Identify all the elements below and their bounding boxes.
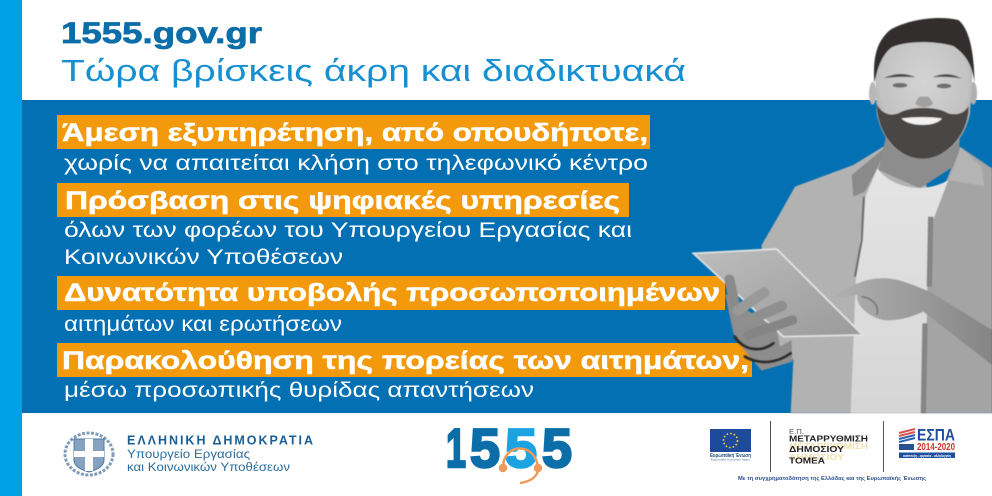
subtitle: Τώρα βρίσκεις άκρη και διαδικτυακά — [61, 53, 686, 88]
collar right — [948, 147, 984, 186]
cross horizontal — [74, 451, 104, 457]
wreath — [65, 433, 113, 475]
programme word 1 reflection: ΜΕΤΑΡΡΥΘΜΙΣΗ — [789, 442, 868, 451]
ministry line 2: και Κοινωνικών Υποθέσεων — [127, 460, 290, 474]
orange highlight 2 — [57, 183, 629, 217]
ESPA logo — [899, 426, 955, 458]
shirt fold — [855, 197, 864, 277]
sidebar stripe — [0, 0, 22, 496]
ESPA slogan bar — [899, 452, 955, 458]
programme word 2: ΔΗΜΟΣΙΟΥ — [789, 444, 844, 454]
tablet — [693, 249, 863, 337]
beard — [877, 104, 969, 159]
programme abbreviation: Ε.Π. — [789, 429, 804, 436]
programme word 2 reflection: ΔΗΜΟΣΙΟΥ — [789, 453, 845, 462]
stars — [724, 434, 738, 448]
eye left — [893, 83, 907, 88]
benefit 1 — [57, 115, 650, 175]
1555 logo — [446, 417, 572, 483]
heading 4: Παρακολούθηση της πορείας των αιτημάτων, — [62, 347, 749, 375]
eyebrow left — [884, 74, 915, 78]
palm — [725, 293, 792, 371]
ministry line 1: Υπουργείο Εργασίας — [127, 447, 250, 461]
description 2 second line: Κοινωνικών Υποθέσεων — [64, 246, 343, 269]
description 4: μέσω προσωπικής θυρίδας απαντήσεων — [64, 379, 534, 402]
digit 1: 1 — [446, 417, 466, 479]
thumb — [729, 279, 735, 305]
mouth — [901, 117, 942, 125]
shield — [74, 439, 104, 472]
programme word 3: ΤΟΜΕΑ — [789, 456, 825, 466]
flag — [710, 429, 751, 452]
orange highlight 4 — [57, 343, 752, 377]
footer emblem: Hellenic Republic — [65, 433, 113, 475]
wristband — [735, 337, 791, 362]
neck — [878, 133, 960, 188]
finger 1 — [738, 293, 764, 310]
digit 5: 5 — [470, 417, 500, 479]
programme logo — [789, 429, 868, 466]
description 3: αιτημάτων και ερωτήσεων — [64, 313, 342, 336]
orange highlight 1 — [57, 115, 650, 149]
EU label: Ευρωπαϊκή Ένωση — [710, 453, 751, 459]
flag stripes — [899, 429, 915, 442]
benefit 4 — [57, 343, 752, 402]
ESPA wordmark: ΕΣΠΑ — [917, 426, 955, 444]
eye right — [937, 84, 951, 88]
orange highlight 3 — [57, 276, 725, 310]
benefit 3 — [57, 276, 725, 336]
t-shirt — [851, 168, 948, 413]
title: 1555.gov.gr — [61, 17, 262, 50]
collar left — [852, 147, 886, 197]
programme word 1: ΜΕΤΑΡΡΥΘΜΙΣΗ — [789, 434, 868, 444]
fund label: Ευρωπαϊκό Κοινωνικό Ταμείο — [711, 458, 750, 462]
heading 2: Πρόσβαση στις ψηφιακές υπηρεσίες — [65, 187, 620, 215]
finger 3 — [748, 320, 793, 335]
description 1: χωρίς να απαιτείται κλήση στο τηλεφωνικό κέντρο — [64, 152, 648, 175]
heading 3: Δυνατότητα υποβολής προσωποποιημένων — [64, 279, 720, 307]
description 2: όλων των φορέων του Υπουργείου Εργασίας και — [64, 219, 632, 242]
face — [875, 40, 973, 158]
ESPA small flags — [899, 444, 914, 450]
divider right — [883, 421, 884, 472]
hair — [874, 18, 975, 83]
shirt placket — [923, 217, 931, 413]
panel: blue band — [22, 100, 992, 413]
cross vertical — [85, 439, 93, 471]
ear left — [869, 82, 876, 105]
eyebrow right — [933, 74, 962, 79]
holding hand — [725, 279, 793, 371]
republic name: ΕΛΛΗΝΙΚΗ ΔΗΜΟΚΡΑΤΙΑ — [127, 434, 313, 448]
ear right — [970, 82, 977, 105]
digit 5 light: 5 — [505, 417, 537, 479]
divider left — [770, 421, 771, 472]
pointing arm — [833, 278, 992, 365]
finger shadows — [862, 297, 878, 315]
co-financing caption: Με τη συγχρηματοδότηση της Ελλάδας και της Ευρωπαϊκής Ένωσης — [738, 476, 926, 482]
digit 5 last: 5 — [542, 417, 572, 479]
footer ministry text — [127, 434, 313, 474]
shirt left panel — [762, 145, 933, 413]
photo: man holding tablet — [693, 18, 992, 413]
nose shadow — [915, 97, 933, 107]
ESPA slogan text: ανάπτυξη - εργασία - αλληλεγγύη — [903, 453, 951, 458]
headset — [500, 448, 541, 483]
EU flag logo — [710, 429, 751, 462]
ESPA years: 2014-2020 — [917, 442, 955, 453]
benefit 2 — [57, 183, 632, 269]
shirt right panel — [925, 147, 992, 413]
finger 2 — [740, 306, 782, 324]
heading 1: Άμεση εξυπηρέτηση, από οπουδήποτε, — [62, 119, 648, 147]
